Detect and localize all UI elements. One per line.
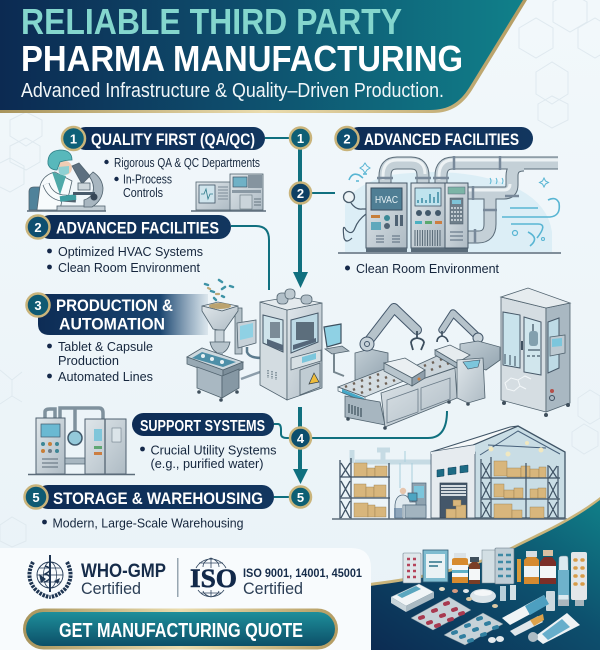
node 5 [290,486,311,508]
QA QC bullets [104,156,260,200]
support bullets [140,442,277,471]
heading: 3 Production and Automation: 3 [34,298,42,313]
heading: 2 Advanced Facilities right: 2 [343,132,351,146]
HVAC label: HVAC [375,195,398,206]
production bullets [47,339,153,384]
carton upright [423,550,448,582]
node 2 [290,182,311,204]
heading: 1 Quality First: QUALITY FIRST (QA/QC) [91,130,255,149]
call to action button [23,608,338,650]
illustration: filling cabinet [501,288,570,417]
red bottle [540,550,556,584]
heading: 5 Storage and Warehousing: STORAGE & WAREHOUSING [53,489,263,508]
production bullets: Tablet & Capsule [58,339,153,354]
heading: support systems [132,413,274,436]
blister red flat [411,597,471,630]
blister blue flat [444,613,503,645]
QA QC bullets: Controls [123,185,163,200]
illustration: support utility systems [28,408,135,474]
header banner [0,0,527,113]
icon: scientist at microscope [27,150,106,211]
production bullets: Production [58,353,119,368]
illustration: pharmaceutical products [391,548,587,645]
ISO certified label: Certified [243,579,303,598]
certification panel [0,548,371,650]
node 4 [290,428,311,448]
icon: WHO emblem [29,555,71,597]
WHO certified label: Certified [81,579,141,598]
heading: 2 Advanced Facilities right: ADVANCED FACILITIES [364,130,519,149]
central flow line with arrows [231,138,447,497]
orange bottle [452,553,468,583]
heading: 2 Advanced Facilities right [336,127,533,150]
node 4: 4 [297,431,305,446]
illustration: warehouse [332,426,567,519]
subtitle: Advanced Infrastructure & Quality–Driven Production. [21,80,444,102]
heading: 5 Storage and Warehousing: 5 [32,490,40,505]
right bullet: clean room: Clean Room Environment [356,261,499,276]
icon: ISO logo: ISO [190,564,237,593]
node 1 [290,128,311,148]
illustration: HVAC system [338,156,561,253]
tube upright [558,556,569,606]
heading: 5 Storage and Warehousing [24,485,274,509]
facilities bullets: Optimized HVAC Systems [58,244,203,259]
WHO-GMP label: WHO-GMP [81,561,166,582]
heading: 2 Advanced Facilities left: 2 [34,220,42,235]
facilities bullets [47,244,203,275]
illustration: hopper and tablet press [187,280,349,402]
loose tablets and vials [439,585,555,643]
facilities bullets: Clean Room Environment [58,260,200,275]
heading: 2 Advanced Facilities left: ADVANCED FACILITIES [56,218,219,238]
tubes flat [502,595,580,644]
heading: 3 Production and Automation [26,294,208,335]
small tube and amber bottle [517,551,539,584]
heading: 1 Quality First [62,127,265,150]
tube with tablets [571,552,587,606]
heading: 3 Production and Automation: PRODUCTION & [56,296,173,315]
heading: 1 Quality First: 1 [70,132,77,146]
bottom right corner panel [370,497,600,650]
storage bullet: Modern, Large-Scale Warehousing [52,516,244,530]
support bullets: (e.g., purified water) [150,456,264,471]
icon: lab analyzer equipment [191,174,266,211]
ISO standards label: ISO 9001, 14001, 45001 [243,566,362,580]
blister upright [403,553,421,583]
illustration: robot arms and conveyor [338,308,500,430]
node 5: 5 [297,490,304,505]
blister pair [482,548,514,584]
node 2: 2 [297,186,304,201]
node 1: 1 [297,131,304,146]
call to action button: GET MANUFACTURING QUOTE [59,620,303,642]
title line 2: PHARMA MANUFACTURING [21,38,463,79]
heading: support systems: SUPPORT SYSTEMS [140,418,265,435]
QA QC bullets: Rigorous QA & QC Departments [114,156,260,170]
production bullets: Automated Lines [58,369,153,384]
heading: 2 Advanced Facilities left [26,215,231,239]
box [391,584,434,612]
support bullets: Crucial Utility Systems [150,442,277,458]
brown bottle [469,557,480,584]
QA QC bullets: In-Process [123,172,172,186]
heading: 3 Production and Automation: AUTOMATION [59,314,165,334]
title line 1: RELIABLE THIRD PARTY [21,1,402,42]
